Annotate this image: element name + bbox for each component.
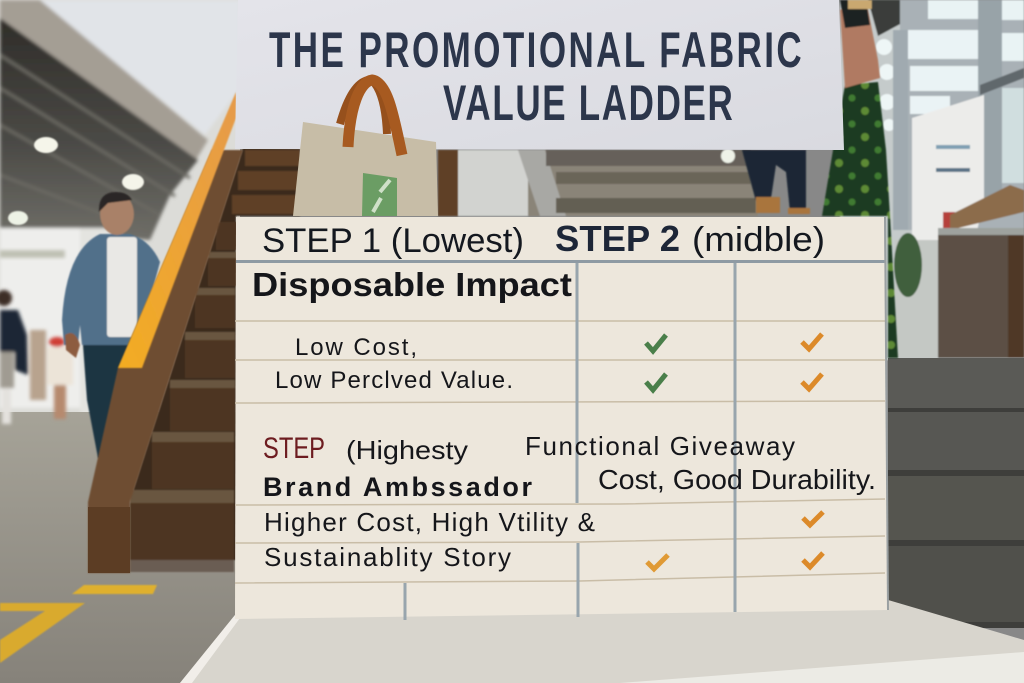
title: THE PROMOTIONAL FABRIC [269,23,802,79]
title [269,23,802,132]
background person in green dress [822,0,898,358]
icon: orange check row 4 col 2 [647,555,668,569]
text: step highest: STEP [263,432,325,465]
wooden stairs, left [130,148,458,572]
background: mall interior, left [0,0,240,683]
ceiling lights [8,137,144,225]
background: centre stairs [458,149,758,216]
text: low cost: Low Cost, [295,334,417,361]
text: sustainability story: Sustainablity Story [264,542,511,572]
grey stone stairs, right [888,358,1024,628]
heading: step 1 and step 2: STEP 1 (Lowest) [262,222,524,260]
icon: green check row 1 [646,335,666,351]
text: cost, good durability: Cost, Good Durability. [598,464,876,495]
icon: orange check row 4 col 3 [803,553,823,567]
background people, left [0,290,73,424]
text: step highest [263,432,468,465]
panel: comparison table board [235,217,888,620]
heading: step 1 and step 2: STEP 2 [555,218,680,259]
icon: tote bag [293,80,438,216]
text: higher cost: Higher Cost, High Vtility & [264,507,595,537]
stone counter [180,600,1024,683]
icon: orange check row 2 [802,374,822,389]
text: low perceived value: Low Perclved Value. [275,367,513,394]
table row and column lines [235,217,888,620]
title: VALUE LADDER [443,76,733,132]
floor markings [0,585,157,663]
icon: orange check row 3 [803,512,823,525]
blurred man in denim jacket [62,192,160,458]
text: brand ambassador: Brand Ambssador [263,472,532,502]
icon: orange check row 1 [802,334,822,349]
wooden balustrade [88,150,243,573]
panel: title sign [235,0,844,150]
icon: green check row 2 [646,374,666,390]
text: step highest: (Highesty [346,435,468,465]
text: functional giveaway: Functional Giveaway [525,431,795,461]
background person on stairs: legs [742,150,810,214]
background: right side windows and stairs [840,0,1024,360]
glowing orange handrail [118,92,236,368]
text: disposable impact: Disposable Impact [252,266,572,303]
heading: step 1 and step 2: (midble) [692,221,825,259]
heading: step 1 and step 2 [262,218,825,260]
